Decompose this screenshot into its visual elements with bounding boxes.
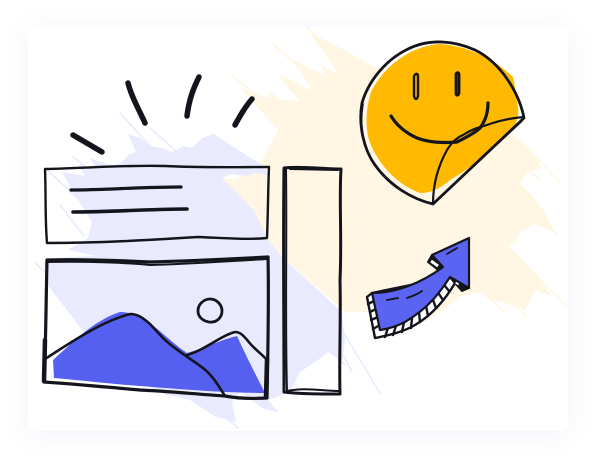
sticker fill — [367, 44, 518, 193]
arrow dashes — [387, 248, 457, 300]
attention rays — [73, 77, 252, 152]
text panel — [45, 166, 269, 243]
mountains fill — [53, 312, 265, 393]
brush stroke: cream — [222, 28, 567, 325]
right eye — [456, 73, 459, 95]
text line one — [71, 187, 181, 190]
arrow hatched edge — [367, 277, 455, 338]
image placeholder — [44, 257, 268, 398]
smiley sticker — [361, 42, 524, 204]
sun — [198, 299, 222, 322]
brush stroke: lavender — [35, 113, 380, 428]
flap curve — [433, 117, 524, 204]
text line two — [73, 209, 187, 212]
smile — [391, 103, 488, 143]
image frame — [44, 257, 268, 398]
card background — [28, 27, 568, 431]
mountain outline small — [187, 332, 267, 360]
left eye — [414, 74, 418, 99]
mountain outline large — [45, 314, 225, 396]
sidebar panel — [284, 167, 341, 394]
curved arrow — [367, 238, 469, 338]
sticker outline — [361, 42, 524, 204]
arrow body — [372, 238, 469, 330]
